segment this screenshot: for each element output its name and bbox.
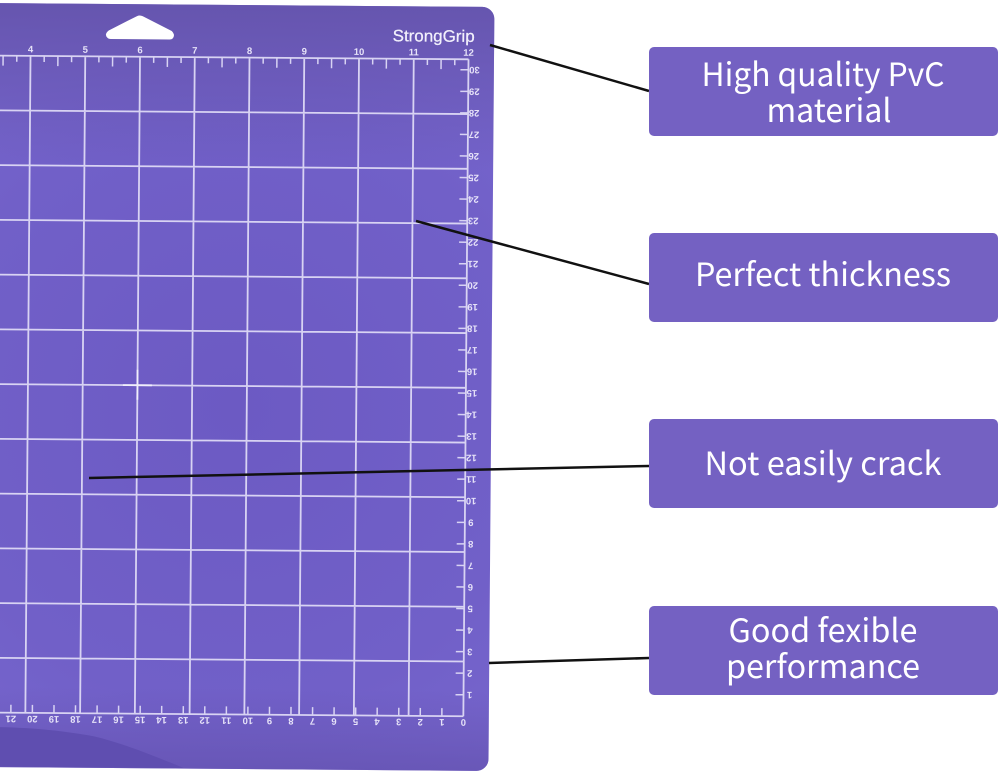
bottom ruler numbers: 2 xyxy=(418,716,423,727)
right ruler numbers: 30 xyxy=(469,64,480,75)
bottom ruler numbers: 20 xyxy=(27,713,38,724)
callout: High quality PvC material: High quality PvC xyxy=(702,50,944,96)
bottom ruler numbers: 18 xyxy=(70,713,81,724)
leader line: thickness xyxy=(416,221,649,284)
right ruler numbers: 29 xyxy=(469,85,480,96)
bottom ruler numbers: 10 xyxy=(242,715,253,726)
bottom ruler numbers: 7 xyxy=(310,715,315,726)
right ruler ticks xyxy=(456,70,468,695)
right ruler numbers: 1 xyxy=(466,689,472,700)
right ruler numbers: 21 xyxy=(467,258,478,269)
leader line: crack resistance xyxy=(89,466,649,478)
bottom ruler numbers: 3 xyxy=(396,716,401,727)
darker wear band at lower left xyxy=(0,727,184,768)
right ruler numbers: 13 xyxy=(466,430,477,441)
callout: High quality PvC material xyxy=(649,47,998,136)
top ruler numbers: 9 xyxy=(302,46,307,58)
callout: High quality PvC material: material xyxy=(766,86,892,132)
right ruler numbers: 5 xyxy=(467,603,473,614)
top ruler numbers: 10 xyxy=(354,47,364,58)
bottom ruler numbers: 8 xyxy=(288,715,294,726)
callout: Not easily crack: Not easily crack xyxy=(704,439,942,485)
bottom ruler numbers: 17 xyxy=(92,713,102,724)
bottom ruler numbers: 0 xyxy=(461,716,466,727)
top ruler numbers: 5 xyxy=(83,45,89,56)
callout: Good fexible performance: Good fexible xyxy=(728,606,918,652)
grid lines xyxy=(0,55,468,716)
bottom ruler numbers: 21 xyxy=(5,713,16,724)
lower mat shading xyxy=(0,686,489,771)
bottom ruler ticks xyxy=(11,705,442,716)
top ruler ticks xyxy=(3,56,455,69)
top ruler numbers: 8 xyxy=(247,46,252,57)
leader line: PVC material xyxy=(490,45,649,91)
right ruler numbers: 27 xyxy=(469,129,479,140)
bottom ruler numbers: 1 xyxy=(438,716,444,727)
right ruler numbers: 8 xyxy=(468,538,473,549)
callout: Not easily crack xyxy=(649,419,998,508)
right ruler numbers: 19 xyxy=(467,301,478,312)
right ruler numbers: 15 xyxy=(466,387,477,398)
bottom ruler numbers: 5 xyxy=(352,715,358,726)
bottom ruler numbers: 16 xyxy=(113,714,124,725)
cutting mat xyxy=(0,3,494,771)
top ruler numbers: 6 xyxy=(137,45,143,56)
right ruler numbers: 6 xyxy=(468,581,473,592)
right ruler numbers: 7 xyxy=(468,560,473,571)
hanging hole xyxy=(106,15,174,39)
top ruler numbers: 11 xyxy=(409,47,420,58)
bottom ruler numbers: 14 xyxy=(156,714,167,725)
right ruler numbers: 12 xyxy=(466,452,477,463)
right ruler numbers: 17 xyxy=(467,344,478,355)
right ruler numbers: 26 xyxy=(468,150,479,161)
right ruler numbers: 28 xyxy=(469,107,479,118)
top ruler numbers: 12 xyxy=(463,48,474,59)
top ruler numbers: 4 xyxy=(28,44,34,55)
right ruler numbers: 9 xyxy=(468,516,474,527)
callout: Good fexible performance: performance xyxy=(726,642,920,688)
mat body xyxy=(0,3,494,771)
right ruler numbers: 11 xyxy=(465,473,476,484)
bottom ruler numbers: 13 xyxy=(178,714,189,725)
right ruler numbers: 25 xyxy=(468,172,479,183)
bottom ruler numbers: 6 xyxy=(331,715,337,726)
right ruler numbers: 20 xyxy=(467,279,478,290)
centre cross mark xyxy=(123,370,152,400)
bottom ruler numbers: 12 xyxy=(199,714,210,725)
right ruler numbers: 3 xyxy=(467,646,473,657)
right ruler numbers: 2 xyxy=(467,667,472,678)
brand name: StrongGrip xyxy=(393,27,475,46)
right ruler numbers: 24 xyxy=(467,193,479,204)
bottom ruler numbers: 11 xyxy=(221,714,231,725)
right ruler numbers: 16 xyxy=(467,365,477,377)
callout: Perfect thickness xyxy=(649,233,998,322)
right ruler numbers: 22 xyxy=(468,236,478,247)
right ruler numbers: 10 xyxy=(466,495,476,506)
bottom ruler numbers: 19 xyxy=(49,713,59,724)
bottom ruler numbers xyxy=(5,713,466,727)
callout: Good fexible performance xyxy=(649,606,998,695)
top ruler numbers xyxy=(28,44,474,59)
right ruler numbers: 18 xyxy=(467,322,478,333)
callout: Perfect thickness: Perfect thickness xyxy=(695,250,951,296)
leader line: flexibility xyxy=(489,658,649,663)
top ruler numbers: 7 xyxy=(192,46,197,57)
right ruler numbers: 14 xyxy=(466,409,477,420)
right ruler numbers xyxy=(463,64,480,700)
bottom ruler numbers: 9 xyxy=(267,715,272,726)
upper mat shading xyxy=(0,3,494,172)
right ruler numbers: 4 xyxy=(467,624,473,635)
right ruler numbers: 23 xyxy=(468,215,479,226)
bottom ruler numbers: 4 xyxy=(374,716,380,727)
bottom ruler numbers: 15 xyxy=(134,714,145,725)
